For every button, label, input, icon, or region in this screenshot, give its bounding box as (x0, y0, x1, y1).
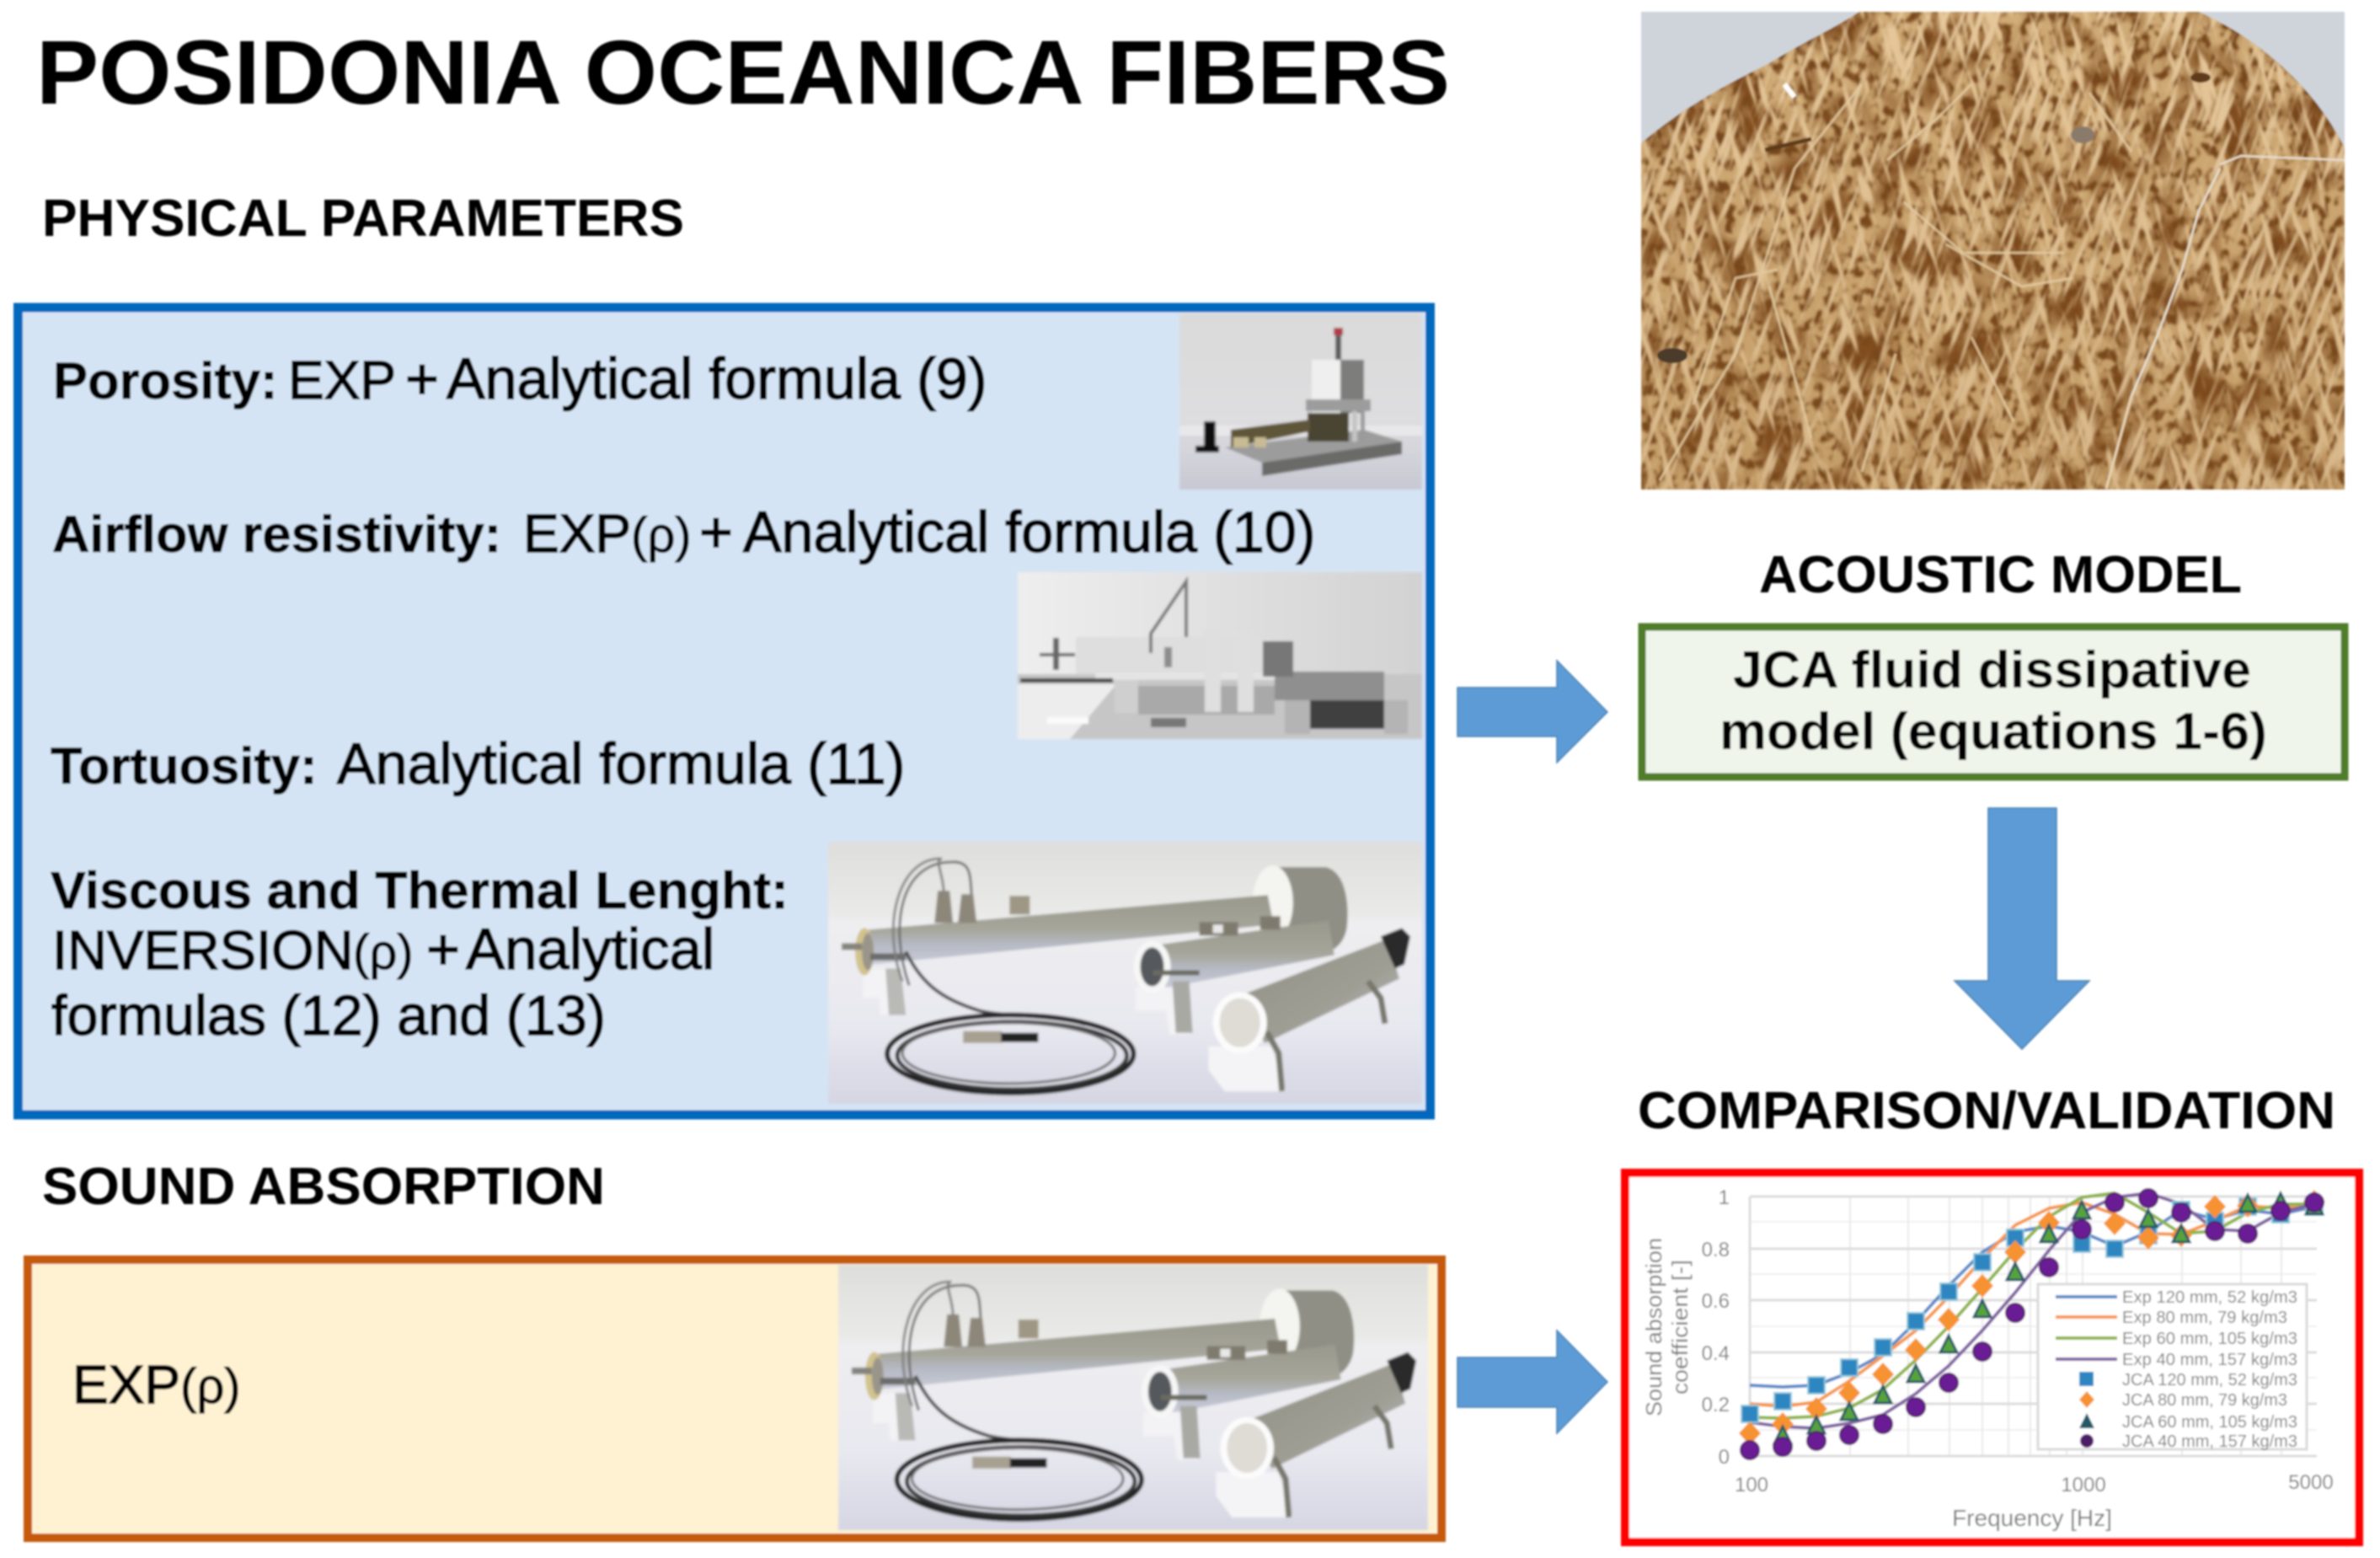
series: jca 60 mm triangles (1774, 1193, 2323, 1443)
y axis tick labels: 0 (1719, 1446, 1730, 1469)
text: jca model: JCA fluid dissipative (1733, 641, 2251, 699)
text: porosity: EXP (288, 350, 396, 410)
photo: porosity apparatus (1179, 313, 1422, 490)
text: airflow resistivity: (ρ) (631, 508, 692, 563)
photo: impedance tubes (828, 842, 1422, 1104)
text: porosity: Analytical formula (9) (447, 347, 987, 411)
heading: physical parameters: PHYSICAL PARAMETERS (42, 190, 684, 248)
legend: JCA 60 mm, 105 kg/m3 (2122, 1413, 2297, 1432)
legend: Exp 40 mm, 157 kg/m3 (2122, 1351, 2297, 1369)
legend: Exp 60 mm, 105 kg/m3 (2122, 1330, 2297, 1348)
text: exp rho: EXP (72, 1354, 180, 1415)
arrow: model to comparison (1955, 808, 2089, 1049)
text: porosity: Porosity: (53, 352, 278, 410)
y axis title: coefficient [-] (1667, 1260, 1693, 1395)
x axis tick labels (1735, 1471, 2334, 1496)
series: jca 40 mm circles (1741, 1189, 2324, 1459)
x axis title: Frequency [Hz] (1952, 1505, 2112, 1531)
arrow: sound absorption to comparison (1457, 1330, 1607, 1433)
panel: sound absorption (28, 1260, 1441, 1538)
text: airflow resistivity: EXP (523, 503, 631, 564)
series: exp lines (1750, 1193, 2314, 1428)
series: jca 80 mm diamonds (1739, 1190, 2325, 1445)
text: porosity: + (405, 347, 439, 411)
legend: JCA 120 mm, 52 kg/m3 (2122, 1371, 2297, 1389)
x axis tick labels: 100 (1735, 1474, 1768, 1496)
text: viscous and thermal length: + (426, 918, 460, 982)
heading: comparison validation: COMPARISON/VALIDATION (1638, 1082, 2335, 1140)
photo: airflow apparatus (1018, 572, 1422, 739)
legend: Exp 80 mm, 79 kg/m3 (2122, 1309, 2287, 1327)
chart: sound absorption coefficient vs frequency (1641, 1186, 2334, 1531)
text: viscous and thermal length: INVERSION (52, 919, 354, 981)
title: POSIDONIA OCEANICA FIBERS (36, 21, 1450, 123)
legend: Exp 120 mm, 52 kg/m3 (2122, 1288, 2297, 1307)
photo: posidonia fibers (1639, 10, 2346, 491)
text: tortuosity: Tortuosity: (51, 737, 318, 795)
y axis tick labels: 0.8 (1702, 1239, 1730, 1261)
series: jca 120 mm squares (1741, 1198, 2323, 1422)
text: exp rho: (ρ) (180, 1359, 241, 1414)
panel: physical parameters (19, 308, 1431, 1115)
legend: JCA 80 mm, 79 kg/m3 (2122, 1391, 2287, 1410)
legend (2038, 1284, 2307, 1451)
text: viscous and thermal length: formulas (12) and (13) (51, 985, 606, 1047)
text: jca model: model (equations 1-6) (1719, 703, 2267, 761)
y axis tick labels: 0.2 (1702, 1394, 1730, 1416)
y axis tick labels (1702, 1186, 1730, 1469)
x axis tick labels: 1000 (2061, 1474, 2106, 1496)
y axis title: Sound absorption (1641, 1238, 1666, 1416)
text: viscous and thermal length: Viscous and Thermal Lenght: (51, 862, 789, 920)
text: airflow resistivity: Airflow resistivity: (52, 506, 501, 564)
arrow: parameters to model (1457, 661, 1607, 763)
heading: sound absorption: SOUND ABSORPTION (42, 1158, 605, 1216)
text: airflow resistivity: + (699, 501, 733, 565)
legend: JCA 40 mm, 157 kg/m3 (2122, 1432, 2297, 1451)
y axis tick labels: 1 (1719, 1186, 1730, 1209)
text: airflow resistivity: Analytical formula (10) (743, 501, 1315, 565)
x axis tick labels: 5000 (2288, 1471, 2334, 1494)
panel: comparison chart (1625, 1173, 2359, 1542)
y axis tick labels: 0.6 (1702, 1290, 1730, 1313)
panel: jca model (1642, 627, 2345, 777)
photo: impedance tubes (838, 1265, 1428, 1530)
text: jca model (1719, 641, 2267, 761)
text: viscous and thermal length: Analytical (466, 917, 714, 982)
text: viscous and thermal length: (ρ) (353, 925, 414, 980)
text: tortuosity: Analytical formula (11) (337, 732, 905, 796)
y axis title (1641, 1238, 1693, 1416)
text: viscous and thermal length (51, 862, 789, 1047)
heading: acoustic model: ACOUSTIC MODEL (1759, 546, 2242, 604)
y axis tick labels: 0.4 (1702, 1342, 1730, 1365)
